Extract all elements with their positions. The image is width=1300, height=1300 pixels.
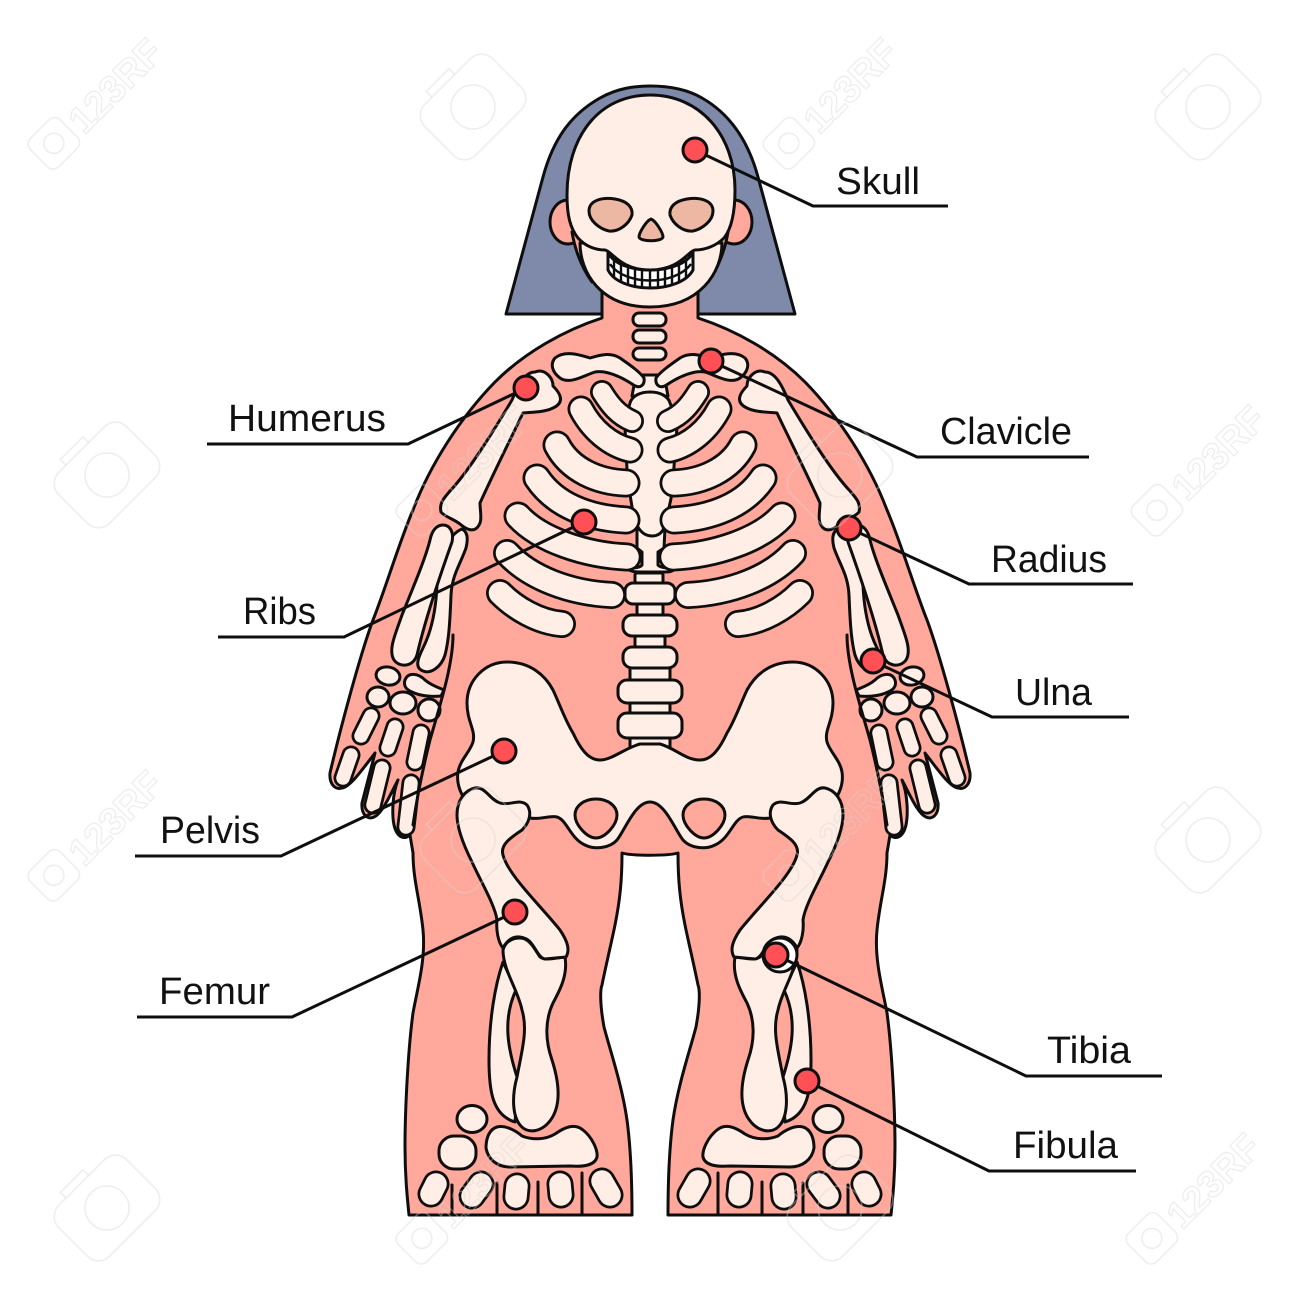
- ears: [550, 200, 752, 282]
- arm and hand bones right: [739, 371, 957, 827]
- sternum: [625, 375, 677, 572]
- clavicles: [552, 354, 748, 387]
- label: Radius: Radius: [991, 539, 1107, 581]
- label: Femur: Femur: [159, 971, 270, 1013]
- body silhouette: [330, 280, 970, 1215]
- leader line: humerus: [207, 388, 526, 444]
- marker: femur: [503, 900, 527, 924]
- leader line: tibia: [776, 955, 1162, 1076]
- marker: radius: [837, 516, 861, 540]
- leader line: skull: [695, 150, 948, 206]
- label: Ribs: Ribs: [243, 591, 316, 633]
- marker: skull: [683, 138, 707, 162]
- jaw: [580, 243, 722, 307]
- marker: ribs: [572, 510, 596, 534]
- spine: [618, 313, 682, 749]
- patella: [763, 938, 797, 972]
- marker: clavicle: [699, 349, 723, 373]
- label: Fibula: Fibula: [1013, 1125, 1119, 1167]
- marker: humerus: [514, 376, 538, 400]
- leader line: radius: [849, 528, 1133, 584]
- ribs left: [500, 392, 632, 624]
- label: Tibia: Tibia: [1047, 1030, 1132, 1072]
- marker: fibula: [795, 1069, 819, 1093]
- leg and foot bones right: [690, 788, 869, 1214]
- marker: ulna: [861, 649, 885, 673]
- teeth: [608, 252, 693, 289]
- eye sockets: [589, 198, 713, 231]
- leader line: ulna: [873, 661, 1129, 717]
- leader line: fibula: [807, 1081, 1136, 1171]
- label: Ulna: Ulna: [1015, 672, 1093, 714]
- label: Humerus: Humerus: [228, 398, 386, 440]
- marker: pelvis: [492, 739, 516, 763]
- arm and hand bones left: [343, 371, 561, 827]
- pelvis: [458, 662, 842, 848]
- nose: [639, 219, 663, 241]
- label: Clavicle: Clavicle: [940, 411, 1072, 453]
- leader line: ribs: [218, 522, 584, 637]
- hair: [506, 86, 795, 314]
- label: Skull: Skull: [836, 161, 920, 203]
- leader line: pelvis: [135, 751, 504, 856]
- ribs right: [668, 392, 800, 624]
- skull cranium: [567, 95, 735, 270]
- leader line: femur: [137, 912, 515, 1017]
- marker: tibia: [764, 943, 788, 967]
- leg and foot bones left: [431, 788, 610, 1214]
- label: Pelvis: Pelvis: [160, 810, 260, 852]
- leader line: clavicle: [711, 361, 1089, 457]
- skeleton torso: [500, 313, 800, 749]
- head: ears, skull, jaw, teeth: [550, 95, 752, 307]
